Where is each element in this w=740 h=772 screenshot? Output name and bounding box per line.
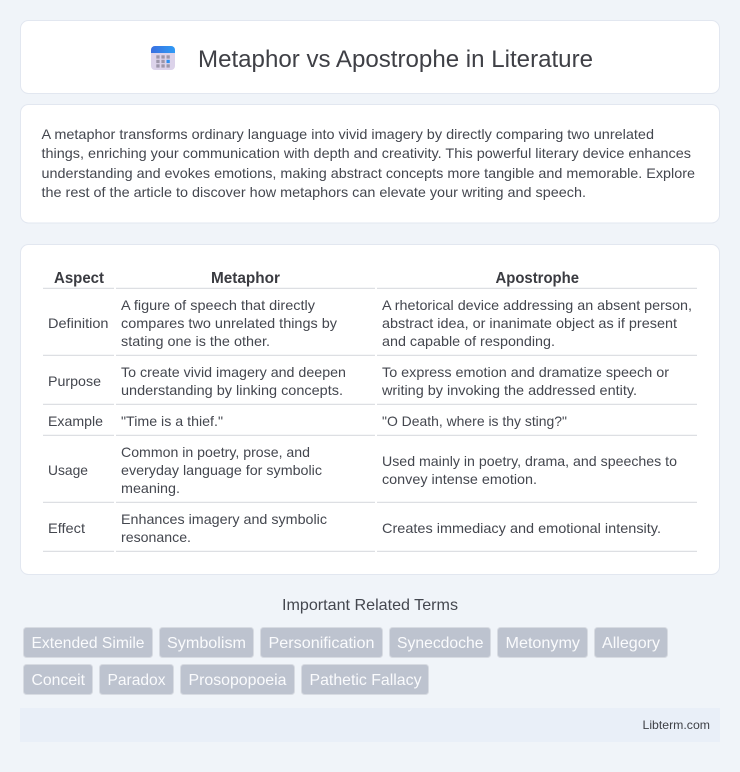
table row: Effect: resonance.	[121, 529, 191, 545]
text block: description paragraph: A metaphor transforms ordinary language into vivid imagery by directly comparing two unrelated	[42, 126, 654, 142]
tag: Pathetic Fallacy	[302, 664, 428, 694]
footer attribution: Libterm.com	[642, 718, 710, 732]
table row: Example: "O Death, where is thy sting?"	[382, 413, 567, 429]
table row: Example: Example	[48, 413, 103, 429]
tag: Synecdoche	[390, 628, 490, 658]
text block: description paragraph: understanding and evokes emotions, making abstract concepts more tangible and memorable. Explore	[42, 165, 695, 181]
table row: Purpose: To express emotion and dramatize speech or	[382, 364, 669, 380]
panel: description	[20, 104, 720, 223]
table row: Usage: Usage	[48, 462, 88, 478]
tag: Personification	[260, 628, 382, 658]
table row: Effect: Creates immediacy and emotional intensity.	[382, 520, 661, 536]
tag: Symbolism	[160, 628, 254, 658]
table row: Usage: everyday language for symbolic	[121, 462, 322, 478]
tag: Allegory	[594, 628, 668, 658]
panel: title header	[20, 20, 720, 94]
table row: Example	[43, 413, 697, 435]
tag: Paradox	[100, 664, 174, 694]
panel: comparison table	[20, 244, 720, 574]
table row: Definition: A rhetorical device addressing an absent person,	[382, 297, 692, 313]
table row: Purpose: writing by invoking the addressed entity.	[381, 382, 637, 398]
table row: Purpose: Purpose	[48, 373, 101, 389]
tag: Conceit	[24, 664, 92, 694]
table row: Usage: Common in poetry, prose, and	[121, 444, 310, 460]
table row: Definition: stating one is the other.	[121, 333, 270, 349]
table row: Effect	[43, 511, 697, 551]
table header row: Apostrophe	[496, 270, 579, 287]
tag: Extended Simile: Extended Simile	[32, 635, 145, 652]
icon: calendar	[151, 46, 175, 70]
table row: Definition: Definition	[48, 315, 108, 331]
tag: Metonymy: Metonymy	[506, 635, 580, 652]
table header row	[43, 270, 697, 288]
tag: Prosopopoeia	[180, 664, 294, 694]
tag: Synecdoche: Synecdoche	[397, 635, 484, 652]
table row: Effect: Effect	[48, 520, 85, 536]
text block: description paragraph: things, enriching your communication with depth and creativity. This powerful literary device enhances	[42, 145, 691, 161]
table row: Purpose: understanding by linking concepts.	[121, 382, 343, 398]
tag: Metonymy	[498, 628, 588, 658]
table row: Definition: and capable of responding.	[382, 333, 555, 349]
tag: Prosopopoeia: Prosopopoeia	[188, 672, 287, 689]
table row: Usage: Used mainly in poetry, drama, and speeches to	[382, 453, 677, 469]
tag: Pathetic Fallacy: Pathetic Fallacy	[310, 672, 422, 689]
title: Metaphor vs Apostrophe in Literature	[198, 46, 593, 73]
tag: Allegory: Allegory	[602, 635, 660, 652]
text block: description paragraph	[42, 126, 695, 200]
heading: important related terms: Important Related Terms	[282, 597, 458, 614]
tag: Personification: Personification	[268, 635, 374, 652]
tag: Extended Simile	[24, 628, 152, 658]
table row: Usage: meaning.	[121, 480, 180, 496]
table header row: Aspect	[54, 270, 104, 287]
tag: Symbolism: Symbolism	[167, 635, 246, 652]
table row: Usage	[43, 444, 697, 502]
table row: Definition: A figure of speech that directly	[121, 297, 315, 313]
related term tags	[24, 628, 668, 694]
table row: Definition: abstract idea, or inanimate object as if present	[382, 315, 677, 331]
table row: Example: "Time is a thief."	[121, 413, 223, 429]
tag: Conceit: Conceit	[32, 672, 86, 689]
footer	[20, 708, 720, 742]
table header row: Metaphor	[211, 270, 280, 287]
table row: Purpose	[43, 364, 697, 404]
tag: Paradox: Paradox	[108, 672, 166, 689]
text block: description paragraph: the rest of the article to discover how metaphors can elevate your writing and speech.	[42, 184, 586, 200]
table row: Usage: convey intense emotion.	[382, 471, 537, 487]
table row: Purpose: To create vivid imagery and deepen	[121, 364, 346, 380]
table row: Definition	[43, 297, 697, 355]
table row: Definition: compares two unrelated things by	[121, 315, 337, 331]
table row: Effect: Enhances imagery and symbolic	[121, 511, 327, 527]
